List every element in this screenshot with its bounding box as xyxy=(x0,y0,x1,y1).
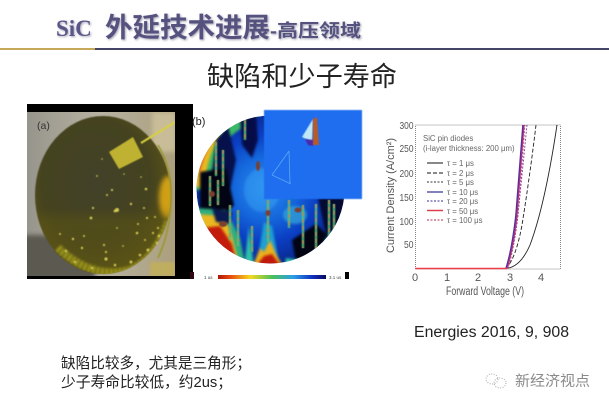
legend: τ = 5 μs xyxy=(447,178,474,187)
icon: wechat xyxy=(486,374,506,388)
plot frame xyxy=(416,125,560,269)
wafer disc xyxy=(35,116,171,274)
defect specks xyxy=(59,158,160,269)
photo background xyxy=(27,112,175,276)
label (a): (a) xyxy=(37,120,50,132)
axis tick labels y: 200 xyxy=(400,168,414,180)
color scale: 1 us xyxy=(204,275,213,280)
lower defect band xyxy=(58,222,168,272)
axis tick labels x: 0 xyxy=(412,272,418,284)
axis tick labels y: 300 xyxy=(400,120,414,132)
bottom right xyxy=(292,224,326,262)
slide title xyxy=(56,13,361,43)
axis tick labels x xyxy=(412,272,544,284)
heading: 缺陷和少子寿命 xyxy=(207,62,397,92)
y axis title: Current Density (A/cm²) xyxy=(385,138,397,253)
panel a: wafer photograph xyxy=(20,104,193,280)
curves xyxy=(415,125,557,268)
legend: τ = 20 μs xyxy=(447,197,478,206)
vertical defect streaks: core xyxy=(210,120,334,256)
yellow edge upper-left xyxy=(196,136,220,190)
summary text: 缺陷比较多，尤其是三角形； xyxy=(61,354,251,372)
axis tick labels y: 50 xyxy=(404,239,414,251)
summary text xyxy=(61,354,251,391)
legend: τ = 50 μs xyxy=(447,207,478,216)
label (b): (b) xyxy=(192,116,205,128)
colored edge regions xyxy=(196,116,344,264)
wafer map xyxy=(196,116,344,264)
summary text: 少子寿命比较低，约2us； xyxy=(61,373,232,391)
x axis title: Forward Voltage (V) xyxy=(446,286,524,298)
legend: τ = 10 μs xyxy=(447,188,478,197)
axis tick labels y: 150 xyxy=(400,192,414,204)
slide title: -高压领域 xyxy=(270,20,361,41)
axis tick labels x: 1 xyxy=(444,272,450,284)
axis tick labels y xyxy=(400,120,414,251)
axis tick labels y: 250 xyxy=(400,143,414,155)
legend: τ = 100 μs xyxy=(447,216,483,225)
watermark xyxy=(486,373,590,390)
test chip xyxy=(109,137,143,169)
lower-left color field xyxy=(198,206,246,259)
color scale: 3.1 us xyxy=(329,275,342,280)
slide title: SiC xyxy=(56,16,92,41)
legend: τ = 1 μs xyxy=(447,159,474,168)
dark blotches xyxy=(212,126,236,190)
probe needle xyxy=(141,122,175,143)
axis tick labels x: 2 xyxy=(475,272,481,284)
inset microscope image xyxy=(264,110,362,199)
color scale xyxy=(190,272,349,280)
chart: current density vs forward voltage xyxy=(385,120,560,298)
panel b: lifetime map xyxy=(190,108,362,280)
header rule xyxy=(0,48,609,50)
legend: (i-layer thickness: 200 μm) xyxy=(423,144,515,153)
center bright patch xyxy=(244,168,280,212)
axis tick labels x: 4 xyxy=(538,272,544,284)
slide title: 外延技术进展 xyxy=(105,13,270,43)
axis tick labels y: 100 xyxy=(400,216,414,228)
legend xyxy=(423,134,515,225)
vertical defect streaks: halo xyxy=(210,120,334,256)
watermark: 新经济视点 xyxy=(515,373,590,390)
defect spots xyxy=(209,161,302,227)
legend: τ = 2 μs xyxy=(447,169,474,178)
citation: Energies 2016, 9, 908 xyxy=(414,324,569,341)
bottom spikes xyxy=(244,226,254,268)
legend: SiC pin diodes xyxy=(423,134,473,143)
green outer top-left xyxy=(196,117,258,192)
axis tick labels x: 3 xyxy=(507,272,513,284)
